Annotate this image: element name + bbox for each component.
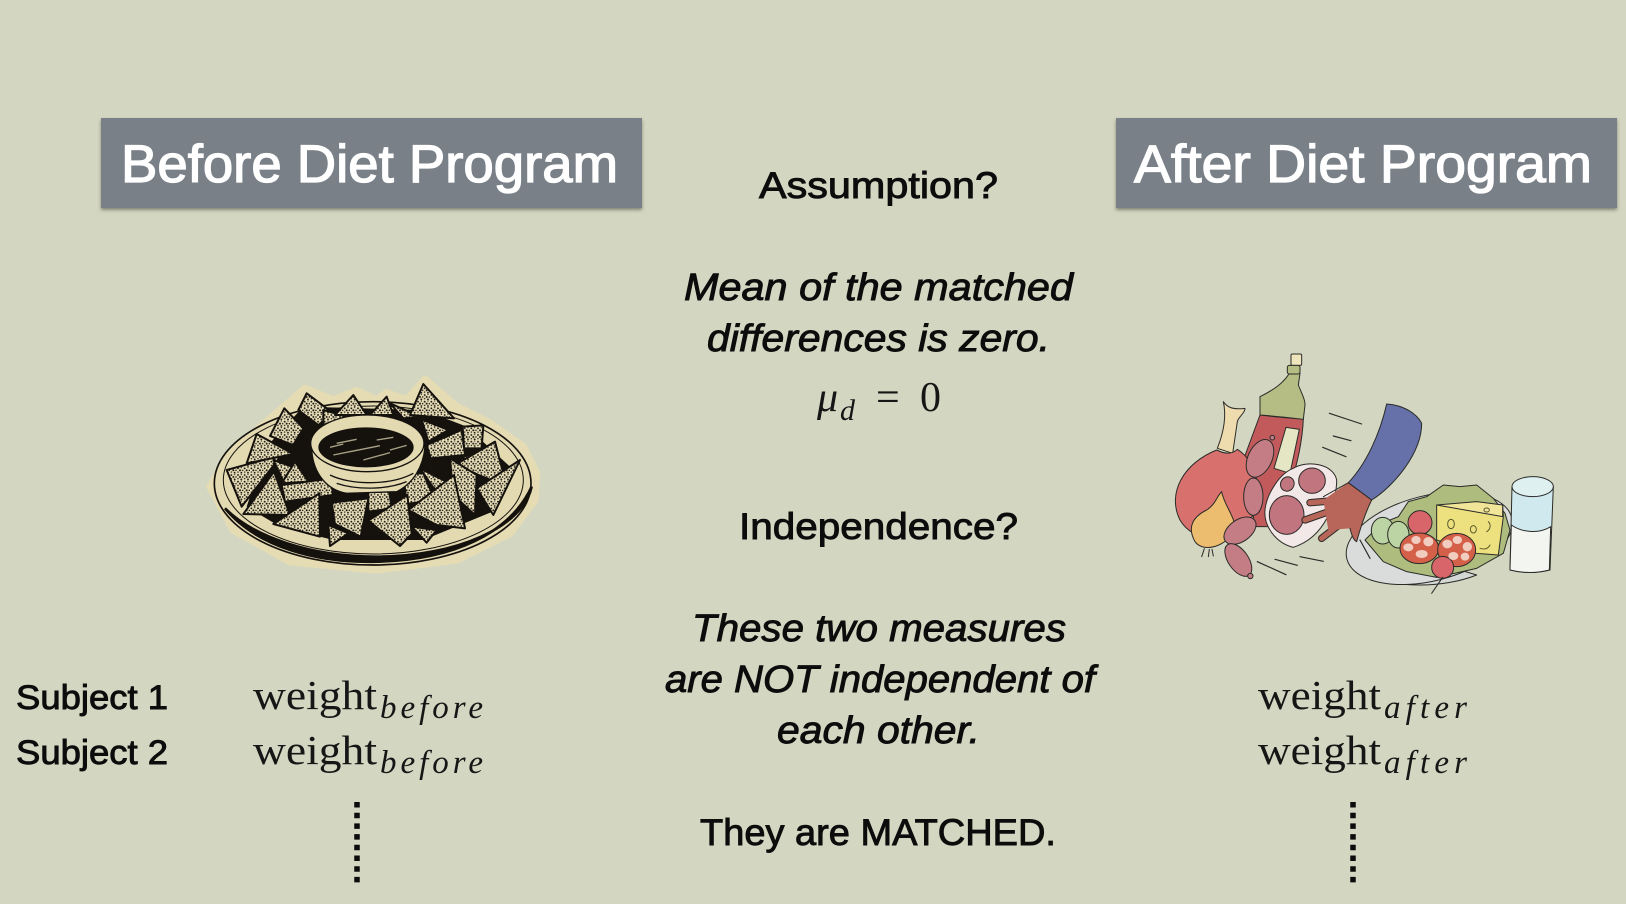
formula: mu d equals zero: μ	[816, 375, 838, 421]
formula: mu d equals zero: = 0	[876, 375, 941, 421]
icon: food being pushed away	[1175, 354, 1553, 600]
formula: mu d equals zero: d	[840, 394, 856, 427]
icon: plate of nachos	[210, 379, 537, 570]
formula: weight after 1: after	[1384, 690, 1467, 726]
heading: Before Diet Program: Before Diet Program	[121, 135, 618, 194]
heading: After Diet Program	[1116, 118, 1617, 208]
vertical dots: before column	[354, 802, 360, 885]
sub: onion	[1191, 492, 1235, 547]
formula: weight before 2	[253, 727, 483, 781]
formula: weight after 2: after	[1384, 745, 1467, 781]
text: They are MATCHED: They are MATCHED.	[700, 812, 1056, 853]
text block: not independent: These two measures	[692, 608, 1066, 650]
sub: plate with salad	[1337, 476, 1522, 600]
sub: steak	[1265, 464, 1337, 547]
label: Subject 1: Subject 1	[16, 679, 168, 717]
sub: glass of milk	[1510, 477, 1553, 572]
text block: mean of the matched differences: Mean of the matched	[684, 267, 1075, 309]
text block: not independent: each other.	[777, 710, 980, 752]
heading: Independence: Independence?	[739, 506, 1018, 547]
sub: hand and sleeve	[1305, 404, 1422, 542]
formula: weight after 1	[1258, 672, 1467, 726]
formula: weight before 2: before	[380, 745, 483, 781]
text block: mean of the matched differences	[684, 267, 1075, 360]
formula: weight before 1: weight	[253, 672, 378, 718]
formula: weight after 2: weight	[1258, 727, 1382, 773]
vertical dots: after column	[1350, 802, 1356, 885]
sub: sausages	[1219, 435, 1279, 581]
formula: weight after 2	[1258, 727, 1467, 781]
formula: weight after 1: weight	[1258, 672, 1382, 718]
text block: not independent	[665, 608, 1099, 752]
heading: Before Diet Program	[101, 118, 642, 208]
heading: After Diet Program: After Diet Program	[1134, 135, 1592, 194]
formula: weight before 2: weight	[253, 727, 378, 773]
label: Subject 2: Subject 2	[16, 734, 168, 772]
sub: wine bottle	[1243, 354, 1305, 527]
sub: salsa bowl	[311, 415, 425, 493]
heading: Assumption: Assumption?	[759, 165, 998, 206]
formula: weight before 1: before	[380, 690, 483, 726]
text block: not independent: are NOT independent of	[665, 659, 1099, 701]
sub: turkey leg	[1175, 402, 1258, 539]
formula: mu d equals zero	[816, 375, 941, 427]
formula: weight before 1	[253, 672, 483, 726]
text block: mean of the matched differences: differences is zero.	[707, 318, 1050, 360]
sub: motion lines	[1257, 413, 1370, 575]
